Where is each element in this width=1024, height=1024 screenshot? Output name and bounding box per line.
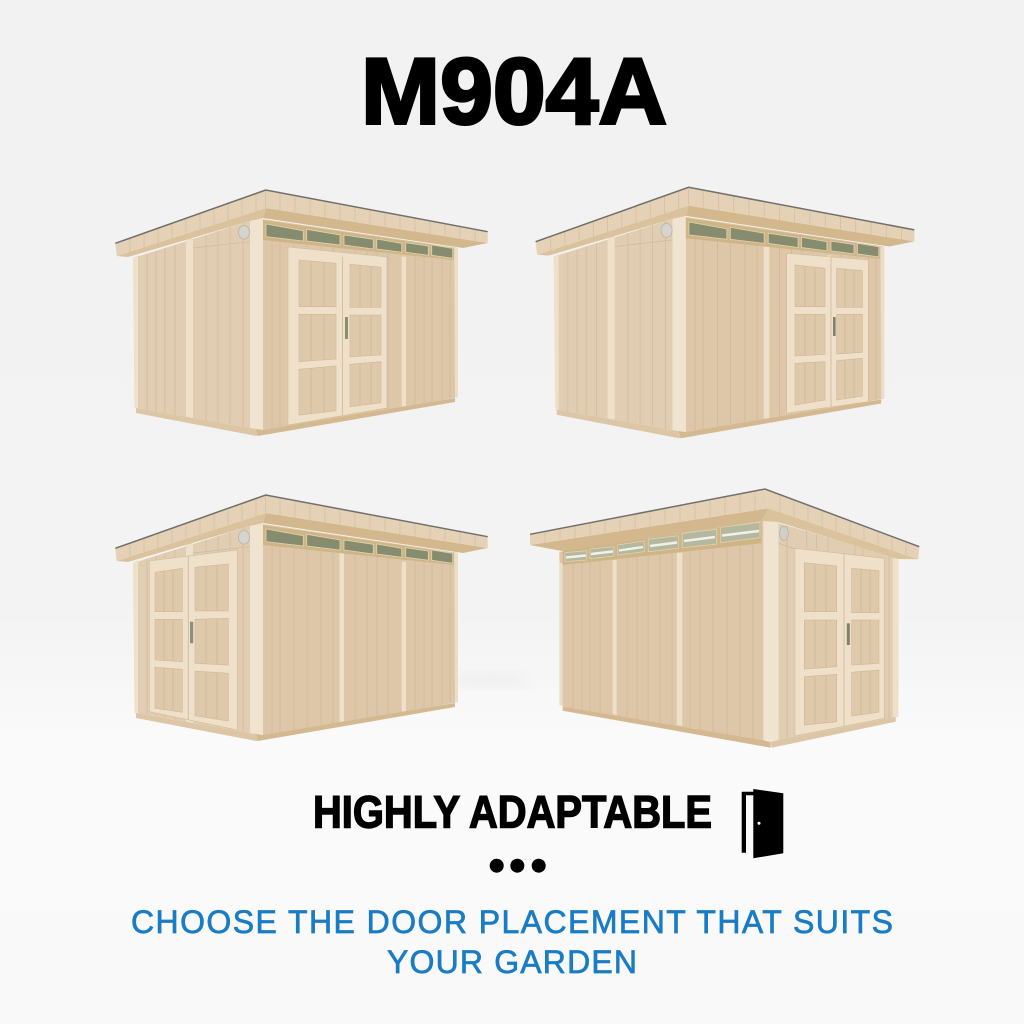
shed 2 clerestory windows [661,218,880,259]
shed 4: mirrored view with door on right wall [530,489,919,748]
shed 3 wall batten [340,553,344,722]
shed 4 clerestory windows [563,522,788,565]
caption text [131,904,893,980]
shed 3 roof [115,495,488,562]
shed 3: door on short wall [115,495,488,741]
shed 4 double door [795,548,884,736]
icon: open door [742,789,783,858]
shed 3 clerestory windows [238,525,454,565]
shed 2 wall batten [764,247,769,419]
shed 1 double door [288,247,387,425]
shed 1 clerestory windows [238,220,454,260]
shed 3 walls [133,523,458,741]
shed 1 roof [115,190,488,257]
ground shadow [450,672,530,688]
shed 4 long wall [559,520,772,747]
shed 1: door centred on long wall [115,190,488,436]
shed 2: door offset to the right of long wall [536,187,914,438]
caption text: CHOOSE THE DOOR PLACEMENT THAT SUITS [131,904,893,940]
shed 4 roof [530,489,919,559]
shed 2 roof [536,187,914,256]
shed 1 walls [133,218,458,436]
shed 4 short wall [563,520,898,748]
heading: highly adaptable: HIGHLY ADAPTABLE [313,786,712,838]
shed 2 walls [554,216,884,438]
shed 3 double door [149,550,237,730]
caption text: YOUR GARDEN [387,944,637,980]
shed 2 double door [787,253,868,413]
three dots separator [490,859,546,873]
title: M904A [361,38,667,144]
